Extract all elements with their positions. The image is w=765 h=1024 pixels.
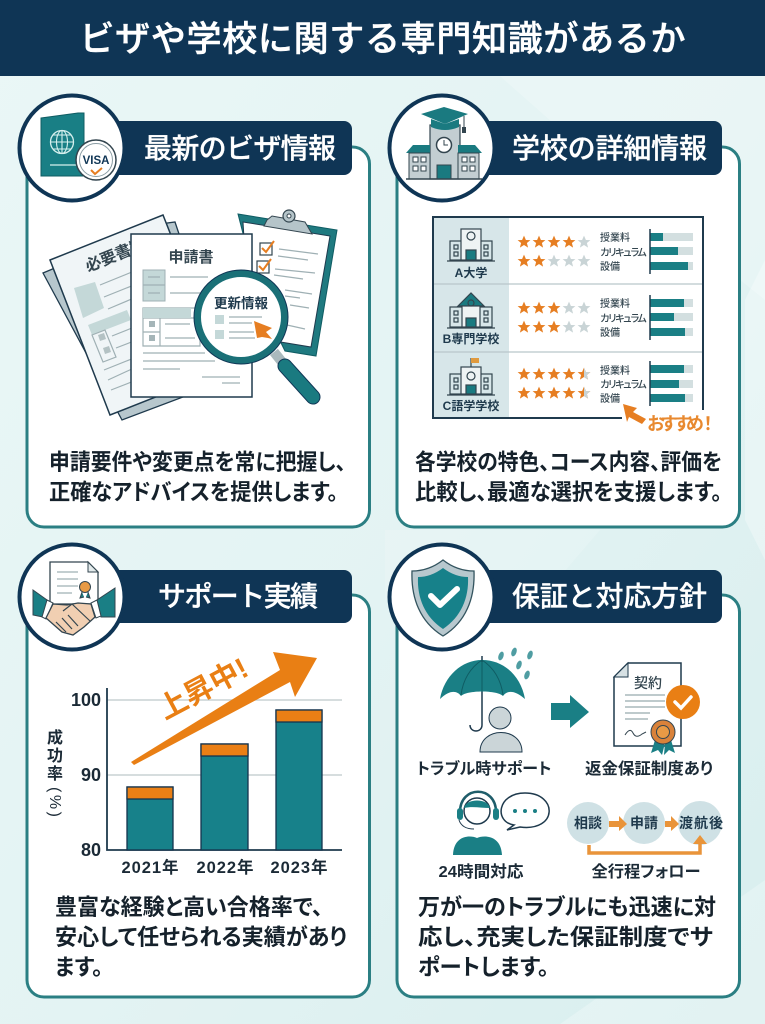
panel: latest visa info [20, 96, 370, 527]
application form: 申請書 [168, 248, 214, 266]
body text [415, 450, 722, 505]
x axis labels: 2022年 [196, 857, 254, 877]
panel: school details [390, 96, 740, 527]
magnifier: 更新情報 [214, 295, 268, 311]
heading bar [110, 121, 352, 175]
icon: shield with check [390, 544, 494, 650]
icon: passport and visa stamp: VISA [83, 155, 109, 167]
label: 24時間対応 [438, 863, 524, 881]
icon: contract with check and seal [614, 663, 700, 755]
y axis title: 率 [47, 765, 63, 783]
bar 2022 [201, 744, 248, 850]
callout: recommended [622, 404, 720, 434]
illustration: documents under magnifier [43, 210, 337, 420]
title banner: ビザや学校に関する専門知識があるか [80, 20, 686, 59]
comparison table [433, 217, 703, 418]
y axis title: 功 [47, 747, 63, 765]
arrow [551, 695, 589, 728]
row: A university: 授業料 [600, 231, 630, 244]
body text: 万が一のトラブルにも迅速に対 [418, 894, 716, 920]
x axis labels: 2021年 [122, 857, 178, 877]
y axis ticks: 80 [81, 840, 101, 860]
icon: handshake and certificate [20, 544, 124, 650]
label: トラブル時サポート [416, 759, 552, 778]
row: A university: A大学 [455, 265, 487, 280]
magnifier [194, 270, 313, 397]
label: 返金保証制度あり [585, 759, 713, 778]
panel: guarantee and response [390, 544, 740, 997]
flow: consult to after departure: 渡航後 [679, 815, 723, 831]
y axis ticks: 100 [71, 690, 101, 710]
y axis ticks [71, 690, 101, 860]
icon: headset operator and speech bubble [453, 792, 549, 855]
application form [131, 234, 252, 397]
row: C language school: C語学学校 [443, 398, 499, 413]
body text: ます。 [55, 955, 103, 980]
panel frame [27, 595, 370, 997]
arrow label: 上昇中! [153, 652, 254, 726]
row: B vocational school: B専門学校 [443, 331, 499, 346]
y axis title [46, 728, 63, 817]
icon: contract with check and seal: 契約 [634, 675, 662, 691]
bar 2021 [127, 787, 173, 850]
heading bar: 保証と対応方針 [512, 581, 707, 612]
back papers: 必要書類 [82, 234, 149, 276]
body text: 比較し、最適な選択を支援します。 [415, 480, 722, 505]
row: B vocational school: 設備 [600, 326, 620, 339]
body text [418, 894, 716, 980]
heading bar: 学校の詳細情報 [512, 133, 707, 164]
heading bar [110, 570, 352, 623]
bar chart: success rate [46, 652, 342, 877]
flow: consult to after departure: 申請 [630, 815, 658, 831]
icon: umbrella and person [440, 647, 534, 752]
panel frame [27, 147, 370, 527]
panel frame [397, 147, 740, 527]
body text: 安心して任せられる実績があり [55, 924, 347, 950]
row: C language school: 授業料 [600, 364, 630, 377]
callout: recommended: おすすめ！ [647, 414, 717, 434]
row: A university: 設備 [600, 260, 620, 273]
body text: 正確なアドバイスを提供します。 [49, 480, 338, 505]
body text: 応し、充実した保証制度でサ [418, 925, 713, 950]
arrow: upward trend [131, 652, 317, 765]
row: C language school: 設備 [600, 392, 620, 405]
y axis title: (%) [46, 787, 63, 817]
body text: ポートします。 [418, 955, 549, 980]
body text [55, 895, 347, 980]
row: B vocational school: 授業料 [600, 297, 630, 310]
row: B vocational school [443, 293, 693, 346]
body text: 申請要件や変更点を常に把握し、 [49, 450, 346, 475]
row: B vocational school: カリキュラム [600, 313, 647, 325]
label: 全行程フォロー [592, 862, 700, 881]
row: A university [447, 229, 693, 280]
flow: consult to after departure [567, 801, 723, 853]
flow: consult to after departure: 相談 [574, 815, 602, 831]
heading bar [480, 121, 722, 175]
heading bar: 最新のビザ情報 [144, 133, 336, 164]
clipboard [238, 210, 337, 356]
row: C language school: カリキュラム [600, 379, 647, 391]
body text: 豊富な経験と高い合格率で、 [55, 895, 323, 920]
bar 2023 [276, 710, 322, 850]
panel frame [397, 595, 740, 997]
title banner [0, 0, 765, 76]
y axis title: 成 [47, 728, 63, 747]
heading bar: サポート実績 [158, 581, 318, 612]
row: C language school [443, 358, 693, 413]
row: A university: カリキュラム [600, 247, 647, 259]
y axis ticks: 90 [81, 765, 101, 785]
x axis labels: 2023年 [270, 857, 328, 877]
panel: support record [20, 544, 370, 997]
icon: school with graduation cap [390, 96, 494, 200]
x axis labels [122, 857, 328, 877]
icon: passport and visa stamp [20, 96, 124, 200]
body text: 各学校の特色、コース内容、評価を [415, 450, 722, 475]
heading bar [480, 570, 722, 623]
back papers [43, 215, 228, 420]
body text [49, 450, 346, 505]
